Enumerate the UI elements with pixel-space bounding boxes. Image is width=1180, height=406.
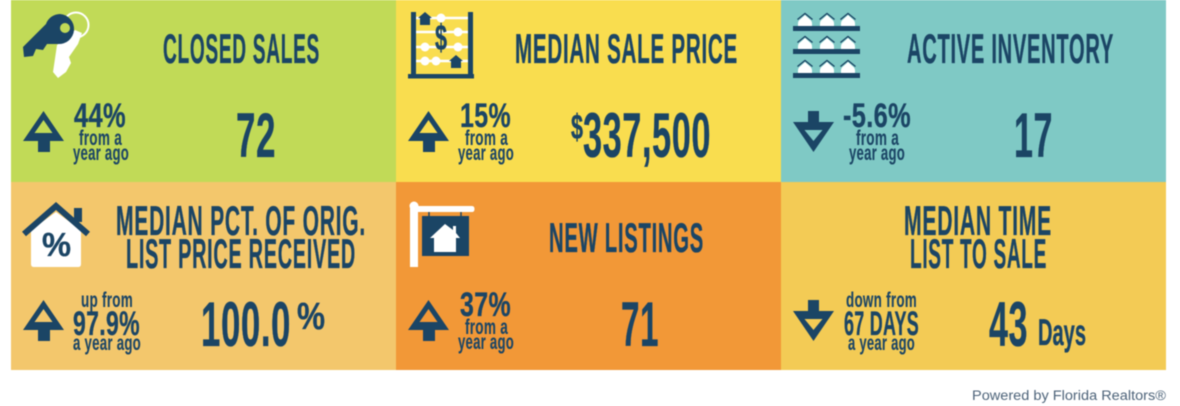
change text: 44% from a year ago: year ago [73, 141, 129, 165]
heading: median time list to sale [904, 197, 1052, 277]
value: 100.0%: % [297, 296, 325, 338]
value: 72: 72 [236, 101, 276, 171]
arrow: up [408, 300, 449, 341]
arrow: down [793, 300, 834, 341]
change text: -5.6% from a year ago: -5.6% [843, 97, 911, 135]
panel: new listings: NEW LISTINGS [549, 214, 704, 261]
change text: 37% from a year ago: year ago [458, 330, 514, 354]
value: 17: 17 [1014, 101, 1053, 171]
change text: down from 67 days a year ago [844, 288, 919, 355]
change text: down from 67 days a year ago: 67 DAYS [844, 305, 919, 343]
value: 43 days: 43 [989, 290, 1028, 360]
panel: median sale price [396, 0, 781, 182]
change text: 37% from a year ago: 37% [460, 286, 511, 324]
change text: up from 97.9% a year ago: up from [81, 288, 133, 312]
change text: 44% from a year ago: 44% [74, 97, 126, 135]
heading: median pct. of orig. list price received [116, 197, 366, 277]
value: 100.0%: 100.0 [201, 290, 291, 360]
panel: new listings [396, 182, 781, 370]
change text: -5.6% from a year ago [843, 97, 911, 165]
value: 43 days: Days [1038, 312, 1086, 353]
change text: up from 97.9% a year ago: a year ago [73, 331, 141, 355]
icon: keys [23, 12, 88, 78]
heading: median pct. of orig. list price received: MEDIAN PCT. OF ORIG. [116, 197, 366, 244]
change text: up from 97.9% a year ago: 97.9% [73, 305, 140, 343]
arrow: up [23, 300, 64, 341]
change text: up from 97.9% a year ago [73, 288, 141, 355]
arrow: down [793, 111, 834, 152]
change text: 44% from a year ago: from a [79, 126, 122, 150]
change text: down from 67 days a year ago: down from [846, 288, 917, 312]
change text: 15% from a year ago: 15% [460, 97, 511, 135]
arrow: up [408, 111, 449, 152]
change text: -5.6% from a year ago: from a [856, 126, 899, 150]
panel: closed sales: CLOSED SALES [163, 25, 320, 72]
change text: 15% from a year ago [458, 97, 514, 165]
footer: powered by florida realtors: Powered by Florida Realtors® [972, 388, 1166, 403]
change text: 37% from a year ago [458, 286, 514, 354]
icon: abacus: $ [435, 17, 447, 58]
panel: median pct of original list price received [11, 182, 396, 370]
change text: down from 67 days a year ago: a year ago [848, 331, 915, 355]
panel: closed sales [11, 0, 396, 182]
value: $337,500 [571, 101, 711, 171]
panel: median sale price: MEDIAN SALE PRICE [515, 25, 738, 72]
change text: 15% from a year ago: from a [465, 126, 508, 150]
panel: active inventory [781, 0, 1166, 182]
panel: median pct of original list price received: LIST PRICE RECEIVED [126, 230, 356, 277]
icon: house with percent [24, 206, 88, 267]
change text: 15% from a year ago: year ago [458, 141, 514, 165]
change text: -5.6% from a year ago: year ago [849, 141, 905, 165]
arrow: up [23, 111, 64, 152]
panel: median time list to sale [781, 182, 1166, 370]
value: $337,500: $ [571, 108, 583, 147]
value: $337,500: 337,500 [583, 101, 711, 171]
value: 71: 71 [621, 290, 659, 360]
icon: abacus [408, 12, 474, 78]
icon: house with percent: % [42, 226, 71, 263]
icon: for sale sign [410, 202, 474, 267]
icon: rows of houses [793, 14, 860, 78]
change text: 44% from a year ago [73, 97, 129, 165]
change text: 37% from a year ago: from a [465, 315, 508, 339]
